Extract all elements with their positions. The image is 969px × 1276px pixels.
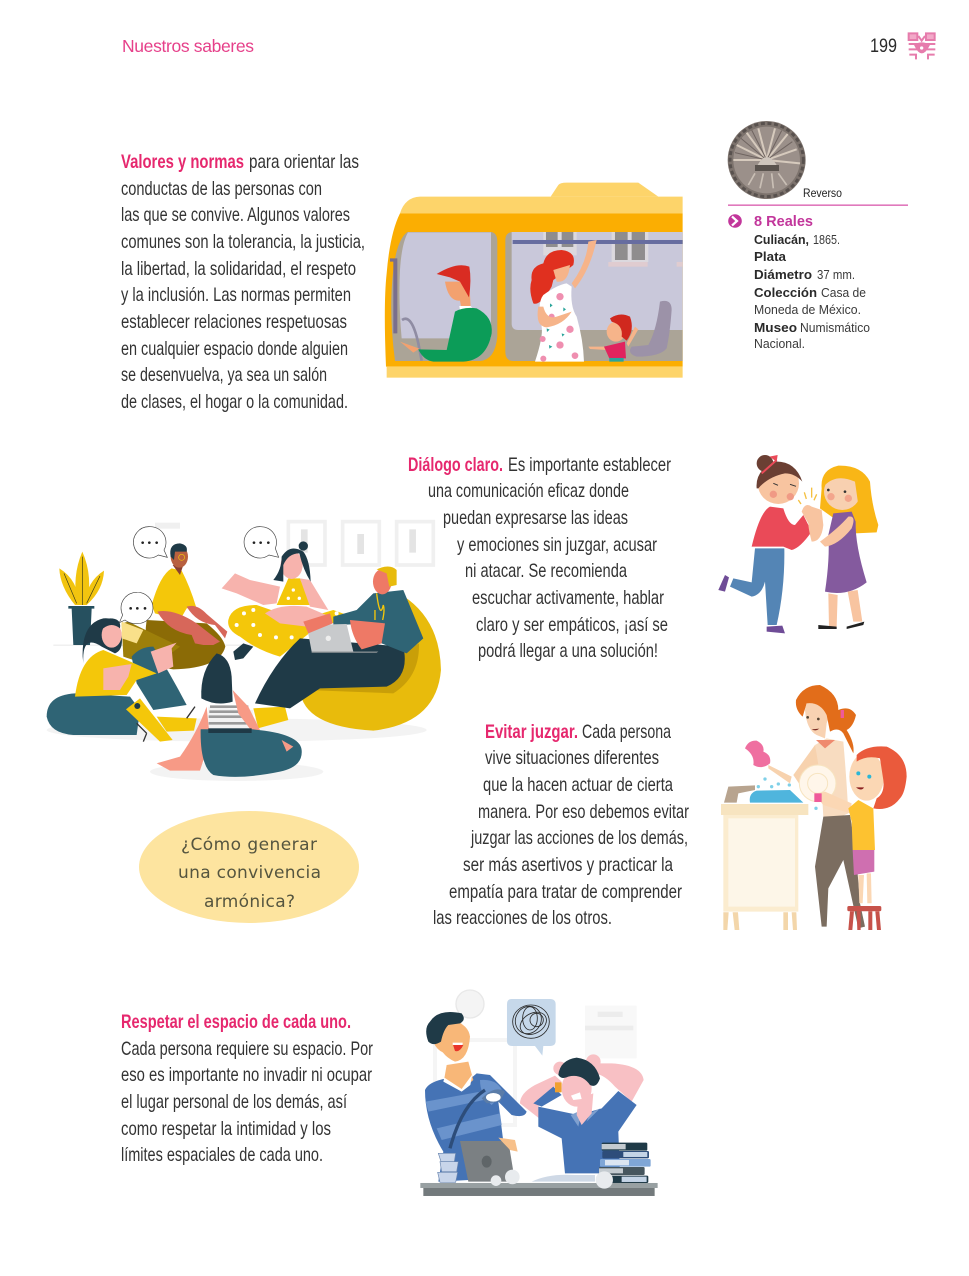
coin data sheet: 37 mm. — [817, 268, 855, 282]
text block: Valores y normas: comunes son la tolerancia, la justicia, — [121, 231, 365, 253]
text block: Evitar juzgar: Cada persona — [582, 721, 671, 743]
illustration: bus with driver, pregnant woman and child — [385, 183, 683, 378]
icon: pre-Hispanic ornament — [909, 33, 935, 59]
text block: Diálogo claro — [408, 454, 671, 662]
coin data sheet: Museo — [754, 320, 797, 335]
text block: Valores y normas: las que se convive. Algunos valores — [121, 204, 350, 226]
text block: Evitar juzgar: juzgar las acciones de los demás, — [470, 827, 688, 849]
illustration: group conversation on bean bags — [47, 522, 441, 781]
text block: Valores y normas: en cualquier espacio donde alguien — [121, 338, 348, 360]
coin data sheet — [754, 213, 870, 351]
text block: Evitar juzgar: Evitar juzgar. — [485, 721, 578, 743]
illustration: stressed student and friend — [420, 990, 658, 1196]
text block: Diálogo claro: una comunicación eficaz donde — [428, 480, 629, 502]
text block: Evitar juzgar — [433, 721, 689, 929]
coin data sheet: Diámetro — [754, 267, 812, 282]
text block: Diálogo claro: y emociones sin juzgar, acusar — [457, 534, 657, 556]
coin data sheet: Culiacán, — [754, 232, 809, 247]
text block: Respetar el espacio: como respetar la intimidad y los — [121, 1118, 331, 1140]
text block: Diálogo claro: podrá llegar a una solución! — [478, 640, 658, 662]
page number: 199 — [870, 36, 897, 57]
callout: question bubble — [139, 811, 359, 923]
text block: Evitar juzgar: ser más asertivos y practicar la — [463, 854, 673, 876]
text block: Diálogo claro: Es importante establecer — [508, 454, 671, 476]
text block: Diálogo claro: ni atacar. Se recomienda — [465, 560, 627, 582]
text block: Valores y normas: establecer relaciones respetuosas — [121, 311, 347, 333]
text block: Respetar el espacio: eso es importante no invadir ni ocupar — [121, 1064, 372, 1086]
coin data sheet: Plata — [754, 249, 787, 264]
text block: Respetar el espacio: Respetar el espacio de cada uno. — [121, 1011, 351, 1033]
coin data sheet: 1865. — [813, 233, 840, 247]
coin data sheet: Casa de — [821, 286, 866, 300]
coin data sheet: Colección — [754, 285, 817, 300]
text block: Diálogo claro: escuchar activamente, hablar — [472, 587, 664, 609]
text block: Valores y normas: Valores y normas — [121, 151, 244, 173]
text block: Valores y normas: y la inclusión. Las normas permiten — [121, 284, 351, 306]
text block: Diálogo claro: Diálogo claro. — [408, 454, 503, 476]
text block: Respetar el espacio: Cada persona requiere su espacio. Por — [121, 1038, 373, 1060]
text block: Valores y normas: conductas de las personas con — [121, 178, 322, 200]
illustration: mother and child washing dishes — [721, 685, 907, 930]
text block: Valores y normas: para orientar las — [249, 151, 359, 173]
coin photo: reverso — [728, 121, 806, 199]
illustration: two girls high-fiving — [718, 455, 878, 633]
text block: Evitar juzgar: las reacciones de los otros. — [433, 907, 612, 929]
text block: Respetar el espacio: límites espaciales de cada uno. — [121, 1144, 323, 1166]
callout: question bubble: armónica? — [204, 892, 295, 912]
text block: Evitar juzgar: manera. Por eso debemos evitar — [478, 801, 689, 823]
text block: Evitar juzgar: empatía para tratar de comprender — [449, 881, 682, 903]
text block: Valores y normas: se desenvuelva, ya sea un salón — [121, 364, 327, 386]
coin data sheet: Nacional. — [754, 337, 805, 351]
coin caption: Reverso — [803, 188, 842, 200]
text block: Respetar el espacio — [121, 1011, 373, 1166]
text block: Respetar el espacio: el lugar personal de los demás, así — [121, 1091, 347, 1113]
coin data sheet: Moneda de México. — [754, 303, 861, 317]
coin data sheet: 8 Reales — [754, 213, 813, 230]
coin data sheet: Numismático — [800, 321, 870, 335]
text block: Evitar juzgar: vive situaciones diferentes — [485, 747, 659, 769]
text block: Diálogo claro: puedan expresarse las ideas — [443, 507, 628, 529]
text block: Valores y normas: la libertad, la solidaridad, el respeto — [121, 258, 356, 280]
text block: Evitar juzgar: que la hacen actuar de cierta — [483, 774, 673, 796]
text block: Diálogo claro: claro y ser empáticos, ¡así se — [476, 614, 668, 636]
callout: question bubble: ¿Cómo generar — [181, 835, 317, 855]
icon: bullet chevron — [728, 214, 742, 228]
callout: question bubble: una convivencia — [178, 863, 321, 883]
text block: Valores y normas — [121, 151, 365, 413]
text block: Valores y normas: de clases, el hogar o la comunidad. — [121, 391, 348, 413]
header: section title: Nuestros saberes — [122, 36, 254, 56]
